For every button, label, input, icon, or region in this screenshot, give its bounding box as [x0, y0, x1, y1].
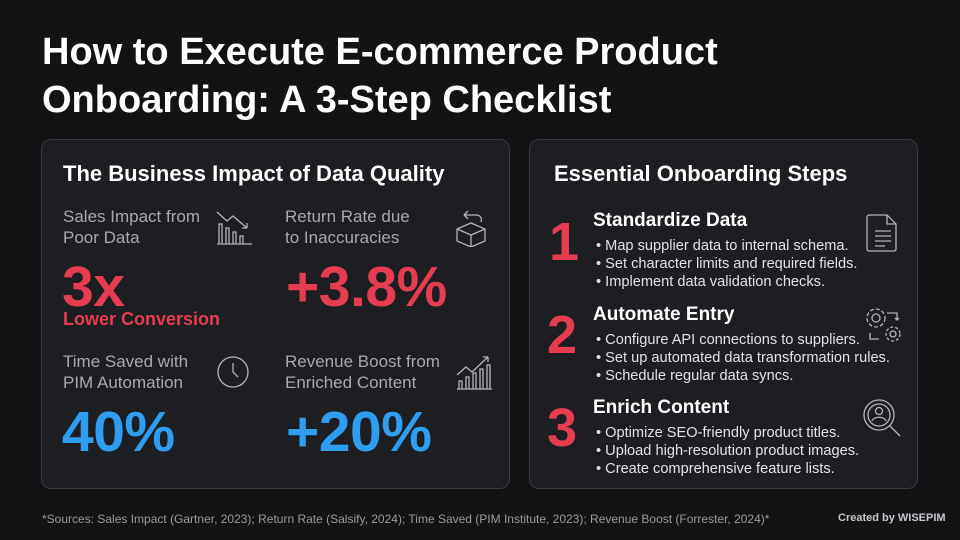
stat: revenue boost: Enriched Content — [285, 373, 416, 392]
stat: return rate: Return Rate due — [285, 207, 410, 226]
stat: return rate: to Inaccuracies — [285, 228, 399, 247]
title: How to Execute E-commerce Product — [42, 31, 718, 73]
step 3: • Optimize SEO-friendly product titles. — [596, 425, 840, 441]
step 1: Standardize Data — [593, 210, 747, 231]
title: Onboarding: A 3-Step Checklist — [42, 79, 611, 121]
step 2: • Schedule regular data syncs. — [596, 368, 793, 384]
step 3: 3 — [547, 398, 577, 458]
stat: sales impact: Lower Conversion — [63, 309, 220, 329]
step 1 — [549, 210, 897, 290]
step 3 — [547, 397, 900, 477]
heading: Essential Onboarding Steps — [554, 161, 847, 186]
step 2: • Configure API connections to suppliers. — [596, 332, 860, 348]
step 2: 2 — [547, 305, 577, 365]
step 1: • Implement data validation checks. — [596, 274, 825, 290]
stat: time saved: Time Saved with — [63, 352, 188, 371]
icon: return box — [456, 210, 486, 247]
heading: The Business Impact of Data Quality — [63, 161, 444, 186]
stat: time saved — [62, 352, 249, 464]
footer: sources: *Sources: Sales Impact (Gartner, 2023); Return Rate (Salsify, 2024); Time Saved (PIM Institute, 2023); Revenue Boost (Forrester, 2024)* — [42, 512, 769, 526]
step 2 — [547, 304, 901, 384]
icon: document — [866, 214, 897, 252]
step 3: • Create comprehensive feature lists. — [596, 461, 835, 477]
credit: Created by WISEPIM — [838, 512, 946, 524]
icon: declining chart — [216, 212, 252, 245]
stat: sales impact: Poor Data — [63, 228, 140, 247]
step 3: • Upload high-resolution product images. — [596, 443, 859, 459]
stat: sales impact — [62, 207, 252, 329]
stat: revenue boost: Revenue Boost from — [285, 352, 440, 371]
stat: return rate: +3.8% — [286, 255, 447, 319]
icon: clock — [217, 356, 249, 388]
step 2: Automate Entry — [593, 304, 734, 325]
step 1: 1 — [549, 212, 579, 272]
stat: time saved: PIM Automation — [63, 373, 183, 392]
stat: sales impact: 3x — [62, 255, 124, 319]
step 2: • Set up automated data transformation rules. — [596, 350, 890, 366]
step 1: • Map supplier data to internal schema. — [596, 238, 849, 254]
panel: business impact — [41, 139, 510, 489]
title — [42, 31, 718, 121]
step 1: • Set character limits and required fields. — [596, 256, 857, 272]
icon: growth chart — [456, 356, 492, 390]
stat: time saved: 40% — [62, 400, 175, 464]
icon: gears — [866, 308, 901, 342]
panel: onboarding steps — [529, 139, 918, 489]
stat: sales impact: Sales Impact from — [63, 207, 200, 226]
stat: revenue boost — [285, 352, 492, 464]
stat: return rate — [285, 207, 486, 319]
icon: magnifier user — [863, 399, 900, 436]
step 3: Enrich Content — [593, 397, 729, 418]
stat: revenue boost: +20% — [286, 400, 431, 464]
